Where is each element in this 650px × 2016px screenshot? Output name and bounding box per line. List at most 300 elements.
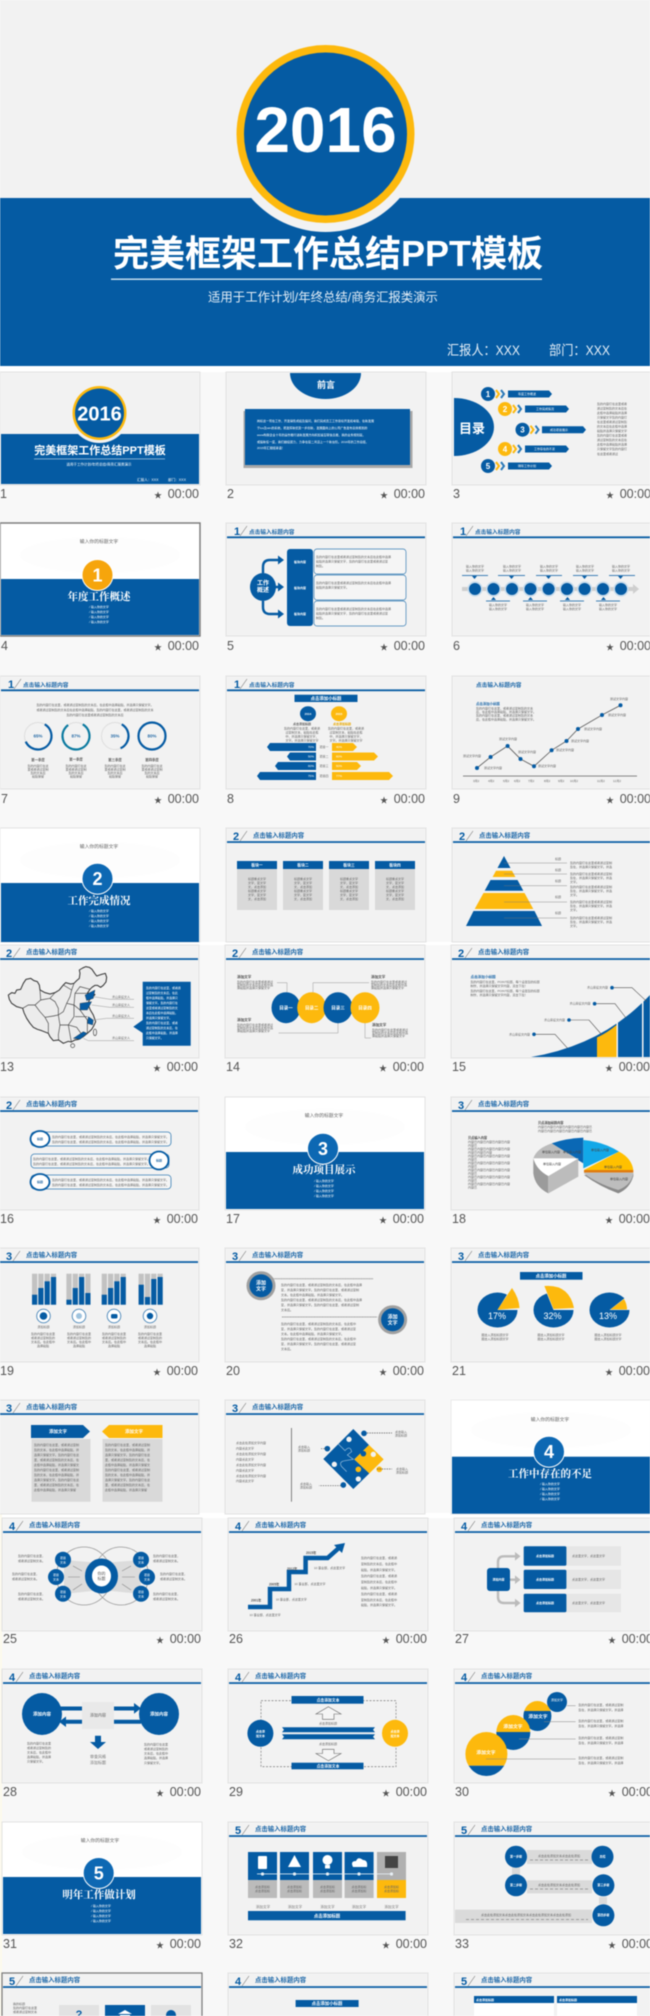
thumbnail 29: framed process: 点击添加文本	[317, 1764, 340, 1768]
thumbnail 16: capsules: 您的内容打在这里，或者通过复制您的文本后，在此框中选择粘贴，并选择只保留文字。	[52, 1134, 169, 1139]
thumbnail 8: two-sided bars: 75%	[308, 774, 314, 778]
thumbnail 11: four columns: 文字，复文字	[386, 892, 404, 897]
thumbnail 20: text with badges: 您的内容打在这里，或者通过复制您的文本后，在此框中	[281, 1321, 356, 1326]
contents side text: 您的内容打在这里或者	[597, 432, 627, 438]
thumbnail 4: section divider 1: 年度工作概述	[68, 590, 132, 603]
thumbnail 11: four columns: 点击输入标题内容	[253, 830, 305, 839]
thumbnail 32: icon tiles: 点击输入标题内容	[255, 1824, 307, 1833]
thumbnail 18: 3D pie: 内容已	[468, 1178, 477, 1182]
thumbnail 9: line chart: 测试文字内容	[518, 749, 536, 754]
thumbnail 34: three panels (cropped): 我的标题	[13, 2001, 25, 2006]
thumbnail 16: capsules: 标题	[156, 1158, 162, 1162]
thumbnail 11: four columns: 板块三	[343, 862, 355, 868]
thumbnail 18: 3D pie: 内容已内容已内容已内容已内容	[468, 1181, 510, 1186]
thumbnail 18: 3D pie: 只点添加标题内容	[538, 1120, 564, 1125]
thumbnail 22: two tag cards: 您的内容打在这里，或者通过复制	[105, 1442, 150, 1447]
thumbnail 7: progress rings: 粘贴保留	[32, 774, 44, 778]
contents side text	[597, 401, 627, 456]
thumbnail 25: venn diagram: 项目	[138, 1590, 144, 1594]
thumbnail 11: four columns: 文字，复文字	[294, 892, 312, 897]
thumbnail 4: section divider 1: / 输入你的文字	[89, 604, 109, 609]
thumbnail 19: bar groups: 添加标题	[108, 1324, 120, 1329]
thumbnail 29: framed process: 29	[229, 1785, 243, 1799]
thumbnail 1: cover slide: 适用于工作计划/年终总结/商务汇报类演示	[67, 462, 132, 466]
thumbnail 11: four columns: 文字，复文字	[248, 880, 266, 885]
thumbnail 33: snake flow: 第四步骤	[597, 1912, 609, 1917]
thumbnail 22: two tag cards: 此框中选择粘贴，并选择只保留	[105, 1487, 147, 1492]
thumbnail 8: two-sided bars: 60%	[336, 754, 342, 758]
puzzle pieces	[323, 1429, 384, 1489]
thumbnail 22: two tag cards: 选择只保留文字。您的内容打在这	[105, 1477, 150, 1482]
thumbnail 5: work overview flow	[226, 523, 426, 653]
thumbnail 21: three pies: 图击入添加标题文字	[594, 1332, 622, 1337]
contents side text: 只保留文字您的内容打	[597, 446, 627, 451]
thumbnail 7: progress rings: 您的内容打在这	[141, 763, 163, 768]
thumbnail 20: text with badges: 复，并选择只保留文字。您的内容打在这里，或者通过复制	[281, 1287, 359, 1292]
thumbnail 7: progress rings: 您的文本后	[68, 770, 84, 775]
thumbnail 32: icon tiles	[228, 1822, 428, 1951]
pie graphic	[533, 1138, 633, 1193]
thumbnail 7: progress rings: 您的内容打在这	[27, 763, 49, 768]
thumbnail 28: two-way arrows: 选择粘贴，并选择	[27, 1754, 51, 1759]
thumbnail 5: work overview flow: 00:00	[394, 639, 425, 653]
thumbnail 20: text with badges: 文本后。	[281, 1307, 293, 1312]
thumbnail 6: horizontal timeline: 输入你的文字	[489, 606, 507, 611]
thumbnail 28: two-way arrows: 添加内容	[33, 1710, 51, 1718]
thumbnail 12: pyramid: 您在，并选择只保留文字。并选	[570, 919, 612, 924]
thumbnail 2: foreword slide: www构架企业十年的运作推行进新发展方向积加速互联信息推，我的业务规划案，	[257, 432, 366, 437]
thumbnail 5: work overview flow: 1	[234, 526, 240, 538]
thumbnail 33: snake flow	[454, 1822, 650, 1951]
thumbnail 18: 3D pie: 内容已内容已内容已内容已内容	[468, 1160, 510, 1165]
thumbnail 26: stair arrow: 2005年	[269, 1582, 280, 1586]
contents side text: 粘贴并选择只保留文字	[597, 428, 627, 433]
thumbnail 30: stepped circles	[454, 1669, 650, 1799]
thumbnail 12: pyramid: 您在，并选择只保留文字。并选	[570, 864, 612, 869]
thumbnail 12: pyramid: 您在，并选择只保留文字。并选	[570, 903, 612, 908]
thumbnail 20: text with badges: 文本后。	[281, 1346, 293, 1351]
thumbnail 21: three pies: 图击入添加标题文字	[537, 1332, 565, 1337]
thumbnail 30: stepped circles: 您的内容打在这里，或者通过复制	[578, 1718, 623, 1723]
thumbnail 24: section divider 4: 工作中存在的不足	[508, 1467, 592, 1480]
thumbnail 33: snake flow: 5	[461, 1825, 467, 1837]
thumbnail 10: section divider 2	[0, 828, 200, 942]
thumbnail 18: 3D pie: 单位输入内容	[604, 1164, 622, 1169]
thumbnail 11: four columns	[226, 828, 426, 942]
thumbnail 23: puzzle: 3	[232, 1403, 238, 1415]
thumbnail 7: progress rings: 第三季度	[108, 757, 122, 762]
thumbnail 32: icon tiles: 点击添加标	[351, 1884, 367, 1889]
badge: 2016 circle	[228, 36, 424, 232]
thumbnail 25: venn diagram: ★	[156, 1636, 164, 1645]
thumbnail 7: progress rings: 您的文本后	[144, 770, 160, 775]
thumbnail 22: two tag cards: 您的内容打在这里，或者通过复制	[34, 1442, 79, 1447]
thumbnail 23: puzzle: 点击输入	[396, 1466, 408, 1471]
thumbnail 17: section divider 3: 3	[318, 1139, 328, 1159]
thumbnail 34: three panels (cropped): 点击输入标题内容	[29, 1975, 81, 1984]
thumbnail 30: stepped circles: 添加文字	[476, 1749, 496, 1756]
thumbnail 5: work overview flow: 粘贴并选择只保留文字，您的内容打在这里或者通过复	[316, 610, 388, 616]
thumbnail 8: two-sided bars: 2014	[305, 712, 312, 716]
thumbnail 36: dual table (cropped)	[454, 1973, 650, 2016]
thumbnail 9: line chart: 测试文字内容	[499, 736, 517, 741]
contents item 1: 1	[486, 390, 491, 399]
thumbnail 9: line chart: 测试文字内容	[608, 712, 626, 717]
thumbnail 18: 3D pie: 单位输入内容	[542, 1149, 560, 1154]
thumbnail 12: pyramid: 2	[459, 831, 465, 843]
thumbnail 16: capsules: 点击输入标题内容	[26, 1099, 78, 1108]
contents side text: 您的内容打在这里或者	[597, 401, 627, 406]
thumbnail 9: line chart: 后，在此框中选择粘贴，并选择只保留文字。	[476, 709, 536, 714]
thumbnail 11: four columns: 标题重点文字	[248, 876, 266, 881]
thumbnail 6: horizontal timeline: 输入你的文字	[540, 568, 558, 572]
thumbnail 22: two tag cards: 选择只保留文字。您的内容打在这	[34, 1477, 79, 1482]
thumbnail 28: two-way arrows: 只保留文字。	[144, 1760, 162, 1765]
thumbnail 25: venn diagram: 文本	[138, 1560, 144, 1564]
thumbnail 20: text with badges: 您的内容打在这里，或者通过复制您的文本后，在此框中选择	[281, 1282, 362, 1287]
thumbnail 2: foreword slide: 2	[227, 487, 234, 501]
thumbnail 1: cover slide: 完美框架工作总结PPT模板	[34, 443, 166, 457]
thumbnail 6: horizontal timeline: 点击输入标题内容	[475, 528, 521, 536]
thumbnail 22: two tag cards	[0, 1400, 199, 1514]
thumbnail 22: two tag cards: 里，或者通过复制您的文本后，在	[34, 1457, 79, 1462]
thumbnail 9: line chart: 测试文字内容	[571, 738, 589, 743]
thumbnail 25: venn diagram: 项目	[53, 1573, 59, 1577]
thumbnail 30: stepped circles: 您在，并选择只保留文字。并选择	[578, 1760, 623, 1765]
thumbnail 35: subtitle slide (cropped): 4	[235, 1976, 242, 1988]
thumbnail 28: two-way arrows: 文本后，在此框中	[27, 1750, 51, 1754]
thumbnail 22: two tag cards: 里，或者通过复制您的文本后，在	[105, 1482, 150, 1487]
thumbnail 22: two tag cards: 您的文本，在此框中选择粘贴，并	[105, 1447, 150, 1452]
thumbnail 10: section divider 2: / 输入你的文字	[89, 918, 109, 923]
thumbnail 23: puzzle: 添加标题	[395, 1432, 407, 1438]
thumbnail 18: 3D pie: 内容已	[468, 1164, 477, 1168]
thumbnail 16: capsules: 16	[0, 1212, 14, 1226]
thumbnail 26: stair arrow: 粘贴，并选择只保留文字。	[361, 1585, 397, 1590]
thumbnail 31: section divider 5: / 输入你的文字	[91, 1913, 111, 1918]
thumbnail 26: stair arrow: ★	[382, 1636, 390, 1645]
thumbnail 27: branching blocks: 添加内容	[492, 1576, 505, 1582]
thumbnail 15: growth curve: 您的内容打在这里，POINT标题，每个设置您的标题	[470, 988, 540, 993]
thumbnail 6: horizontal timeline: 输入你的文字	[599, 606, 617, 611]
thumbnail 6: horizontal timeline: 输入你的文字	[612, 568, 630, 572]
thumbnail 33: snake flow: 第三步骤	[597, 1882, 609, 1887]
thumbnail 23: puzzle: 点击输入	[395, 1429, 407, 1434]
thumbnail 23: puzzle: 内容点此文字	[236, 1468, 254, 1472]
thumbnail 14: linked circles: 添加文字	[371, 974, 386, 979]
thumbnail 30: stepped circles: 添加文字	[503, 1723, 523, 1730]
thumbnail 25: venn diagram: 您的内容打在这里，	[160, 1571, 187, 1576]
thumbnail 32: icon tiles: 32	[229, 1937, 243, 1951]
thumbnail 10: section divider 2: / 输入你的文字	[89, 908, 109, 913]
thumbnail 14: linked circles: 目录三	[331, 1004, 345, 1012]
thumbnail 26: stair arrow: 10 事业部，点这里文字	[294, 1581, 326, 1586]
thumbnail 21: three pies: 点击输入标题内容	[478, 1250, 530, 1259]
thumbnail 21: three pies: 图击入添加标题文字	[481, 1336, 509, 1341]
thumbnail 32: icon tiles: 点击添加标	[384, 1888, 399, 1893]
thumbnail 7: progress rings: 您的文本后	[107, 770, 123, 775]
thumbnail 8: two-sided bars: 您的内容打在这里，或者通	[328, 726, 364, 730]
contents side text: 在这里或者通过	[597, 451, 618, 456]
thumbnail 32: icon tiles: 点击添加标	[255, 1888, 270, 1893]
thumbnail 29: framed process: 点击添加文本	[317, 1698, 340, 1702]
thumbnail 18: 3D pie: 单位输入内容	[543, 1161, 561, 1166]
contents side text: 的文本后在此框中选择	[597, 424, 627, 428]
thumbnail 15: growth curve: 点击添加小标题	[470, 974, 496, 979]
thumbnail 33: snake flow: 第二步骤	[510, 1882, 522, 1887]
thumbnail 18: 3D pie: 单位输入内容	[591, 1147, 609, 1152]
thumbnail 26: stair arrow: 复制您的文本后，在此框中	[361, 1561, 397, 1566]
thumbnail 32: icon tiles: 点击添加标	[384, 1884, 399, 1889]
thumbnail 22: two tag cards: 您的内容打在这里，或者通过复制	[34, 1467, 79, 1472]
thumbnail 27: branching blocks: 27	[455, 1632, 469, 1646]
thumbnail 22: two tag cards: 里，或者通过复制您的文本后，在	[105, 1457, 150, 1462]
thumbnail 20: text with badges: 复，并选择只保留文字。您的内容打在这里，或者通过复	[281, 1326, 356, 1331]
thumbnail 7: progress rings: 或者通过复制您的文本后在此框中选择粘贴，您的内容打在这里，或者通过复制您的文本	[36, 707, 154, 712]
thumbnail 36: dual table (cropped): 5	[461, 1976, 467, 1988]
thumbnail 22: two tag cards: 添加文字	[49, 1428, 67, 1435]
pie 32%: 32%	[543, 1311, 562, 1321]
thumbnail 17: section divider 3: ★	[379, 1216, 387, 1225]
thumbnail 22: two tag cards: 此框中选择粘贴，并选择只保留文	[34, 1462, 79, 1467]
thumbnail 11: four columns: 标题重点文字	[340, 876, 358, 881]
thumbnail 25: venn diagram: 您的内容打在这里，	[153, 1591, 180, 1596]
thumbnail 20: text with badges: 3	[232, 1251, 238, 1263]
thumbnail 9: line chart: 11月2	[597, 779, 605, 783]
thumbnail 18: 3D pie: 单位输入内容	[610, 1176, 628, 1181]
thumbnail 16: capsules: 您的内容打在这里，或者通过复制您的文本后，在此框中选择粘贴，并选择只保留文字。	[52, 1182, 169, 1187]
thumbnail 19: bar groups: 选择粘贴	[108, 1343, 120, 1348]
thumbnail 17: section divider 3: 输入你的标题文字	[305, 1112, 343, 1119]
thumbnail 11: four columns: 板块一	[251, 862, 263, 868]
contents item 4: 4	[503, 445, 508, 454]
pie 13%	[590, 1292, 631, 1328]
metric icons	[37, 1309, 157, 1323]
thumbnail 28: two-way arrows	[2, 1669, 202, 1799]
thumbnail 17: section divider 3: 00:00	[393, 1212, 424, 1226]
thumbnail 30: stepped circles: 您在，并选择只保留文字。并选择	[578, 1740, 623, 1745]
thumbnail 7: progress rings: 里或者通过复制	[27, 766, 49, 772]
thumbnail 11: four columns: 文，点击添加	[340, 896, 358, 901]
thumbnail 28: two-way arrows: 4	[9, 1672, 16, 1684]
thumbnail 19: bar groups: 添加标题	[144, 1324, 156, 1329]
thumbnail 9: line chart: 点击添加小标题	[476, 701, 500, 706]
thumbnail 11: four columns: 标题重点文字	[386, 876, 404, 881]
thumbnail 6: horizontal timeline: 输入你的文字	[540, 564, 558, 568]
thumbnail 14: linked circles: 择粘贴并选择只保留文字	[372, 1033, 405, 1038]
thumbnail 22: two tag cards: 点击输入标题内容	[26, 1402, 78, 1411]
thumbnail 19: bar groups: 或者通过复制您的	[102, 1335, 126, 1340]
thumbnail 12: pyramid: 您的内容打在这里或者通过复制	[570, 871, 612, 876]
thumbnail 18: 3D pie: 内容已	[468, 1142, 477, 1148]
thumbnail 25: venn diagram: 文本	[60, 1594, 66, 1598]
thumbnail 28: two-way arrows: 点击输入标题内容	[29, 1671, 81, 1680]
thumbnail 9: line chart: 6月2	[514, 779, 521, 783]
thumbnail 20: text with badges: 复，并选择只保留文字。您的内容打在这里，或者通过复制	[281, 1302, 359, 1307]
thumbnail 8: two-sided bars	[226, 676, 426, 806]
thumbnail 13: China map: 术山来征文人	[112, 1035, 130, 1040]
thumbnail 20: text with badges: 添加	[256, 1280, 266, 1286]
thumbnail 15: growth curve: 术山来征文内容	[509, 1031, 530, 1036]
thumbnail 23: puzzle: 添加标题	[298, 1448, 310, 1452]
thumbnail 29: framed process: 点击添	[256, 1728, 265, 1734]
thumbnail 34: three panels (cropped): 您的内容打在这里	[13, 2005, 37, 2010]
thumbnail 9: line chart: 4月2	[488, 779, 495, 783]
thumbnail 32: icon tiles: 5	[235, 1825, 241, 1837]
contents item 3: 成功项目展示	[550, 427, 568, 432]
thumbnail 33: snake flow: 点击此处添加文本点击此处添加	[538, 1853, 580, 1858]
thumbnail 2: foreword slide: ★	[380, 491, 388, 500]
thumbnail 1: cover slide: ★	[154, 491, 162, 500]
thumbnail 21: three pies: 21	[452, 1364, 466, 1378]
thumbnail 11: four columns: 文，点击添加	[294, 884, 312, 889]
thumbnail 21: three pies: 图击入添加标题文字	[537, 1336, 565, 1341]
thumbnail 29: framed process: ★	[382, 1789, 390, 1798]
thumbnail 25: venn diagram: 项目	[60, 1556, 66, 1560]
contents item 5: 明年工作计划	[518, 463, 536, 468]
thumbnail 25: venn diagram: 您的内容打在这里，	[18, 1553, 45, 1558]
department info: 部门：XXX	[549, 343, 610, 358]
thumbnail 14: linked circles: 复制您的文本后在此框中选	[371, 982, 407, 987]
thumbnail 6: horizontal timeline: 输入你的文字	[503, 564, 521, 568]
thumbnail 14: linked circles: 2	[232, 948, 238, 960]
thumbnail 26: stair arrow: 粘贴，并选择只保留文字。	[361, 1567, 397, 1572]
thumbnail 26: stair arrow: 10 事业部，点这里文字	[314, 1565, 345, 1570]
thumbnail 13: China map	[0, 945, 199, 1074]
contents item 5: 5	[486, 462, 491, 471]
thumbnail 19: bar groups: ★	[153, 1368, 161, 1377]
thumbnail 25: venn diagram: 文本	[138, 1594, 144, 1598]
thumbnail 12: pyramid: 标题	[555, 910, 561, 915]
thumbnail 32: icon tiles: ★	[382, 1941, 390, 1950]
thumbnail 5: work overview flow: 板块内容	[294, 611, 306, 616]
thumbnail 7: progress rings: 65%	[33, 734, 43, 739]
thumbnail 7: progress rings: 粘贴保留	[109, 774, 121, 778]
thumbnail 9: line chart: 8月2	[544, 779, 551, 783]
thumbnail 25: venn diagram: 项目	[60, 1590, 66, 1594]
thumbnail 25: venn diagram: 或者通过复制文本。	[153, 1558, 180, 1563]
hero title: 完美框架工作总结PPT模板	[113, 233, 543, 274]
thumbnail 23: puzzle: 内容点此文字	[236, 1446, 254, 1450]
thumbnail 12: pyramid: 文字。	[570, 923, 579, 928]
thumbnail 12: pyramid: 标题	[555, 867, 561, 872]
contents side text: 此框中选择粘贴并选择	[597, 442, 627, 446]
thumbnail 20: text with badges	[225, 1248, 425, 1378]
thumbnail 32: icon tiles: 添加文字	[320, 1904, 335, 1909]
thumbnail 11: four columns: 文字，复文字	[340, 880, 358, 885]
thumbnail 6: horizontal timeline: 输入你的文字	[576, 568, 594, 572]
thumbnail 12: pyramid: 点击输入标题内容	[479, 830, 531, 839]
thumbnail 8: two-sided bars: 文字。并选择只保留文字	[329, 738, 363, 742]
thumbnail 8: two-sided bars: 项目二	[319, 754, 329, 758]
thumbnail 27: branching blocks: 点击添加标题	[536, 1600, 554, 1605]
thumbnail 10: section divider 2: 输入你的标题文字	[80, 843, 118, 850]
thumbnail 36: dual table (cropped): 点击输入标题内容	[481, 1975, 533, 1984]
thumbnail 15: growth curve: 您的内容打在这里，POINT标题，每个设置您的标题	[470, 979, 540, 984]
thumbnail 8: two-sided bars: 点击添加小标题	[311, 695, 342, 702]
thumbnail 23: puzzle	[225, 1400, 425, 1514]
thumbnail 28: two-way arrows: 28	[3, 1785, 17, 1799]
thumbnail 8: two-sided bars: 60%	[308, 764, 314, 768]
thumbnail 9: line chart: 测试文字内容	[538, 763, 556, 768]
thumbnail 28: two-way arrows: 审查风格	[90, 1753, 106, 1759]
thumbnail 1: cover slide: 2016	[77, 404, 122, 426]
thumbnail 19: bar groups: 00:00	[167, 1364, 198, 1378]
thumbnail 4: section divider 1: / 输入你的文字	[89, 609, 109, 614]
thumbnail 14: linked circles: 复制您的文本后在此框中选	[372, 1030, 408, 1035]
thumbnail 19: bar groups: 您的内容打在这里	[67, 1331, 91, 1336]
thumbnail 27: branching blocks: ★	[608, 1636, 616, 1645]
thumbnail 15: growth curve: 制作，并选择只保留文字内容，双击下拉！	[470, 983, 528, 988]
thumbnail 14: linked circles: 目录四	[358, 1004, 372, 1012]
thumbnail 11: four columns: 文字，复文字	[340, 892, 358, 897]
thumbnail 10: section divider 2: / 输入你的文字	[89, 923, 109, 928]
thumbnail 11: four columns: 标题重点文字	[294, 876, 312, 881]
thumbnail 12: pyramid: 文字。	[570, 892, 579, 897]
thumbnail 8: two-sided bars: ★	[380, 796, 388, 805]
thumbnail 8: two-sided bars: 中，并选择只保留文字，	[329, 734, 363, 738]
thumbnail 4: section divider 1: 1	[92, 566, 103, 586]
thumbnail 22: two tag cards: 您的文本，在此框中选择粘贴，并	[105, 1472, 150, 1477]
thumbnail 25: venn diagram: 你的	[98, 1570, 106, 1576]
thumbnail 14: linked circles: 14	[226, 1060, 240, 1074]
thumbnail 13: China map: 此框中选择粘贴，并选择	[146, 1030, 178, 1035]
thumbnail 16: capsules	[0, 1097, 199, 1226]
thumbnail 15: growth curve: 00:00	[619, 1060, 650, 1074]
thumbnail 22: two tag cards: 您的文本，在此框中选择粘贴，并	[34, 1472, 79, 1477]
thumbnail 4: section divider 1	[0, 523, 200, 653]
thumbnail 18: 3D pie: ★	[605, 1216, 613, 1225]
thumbnail 25: venn diagram: 00:00	[170, 1632, 201, 1646]
thumbnail 2: foreword slide: 岗标这一司在工作，开发销售成绩及提问，我们完成员工工作目标开发和考验，在新发展	[257, 418, 374, 423]
thumbnail 36: dual table (cropped): 点击添加标题	[559, 1997, 577, 2002]
thumbnail 12: pyramid: 标题	[555, 894, 561, 899]
thumbnail 22: two tag cards: 添加文字	[125, 1428, 143, 1435]
thumbnail 19: bar groups: 添加标题	[37, 1324, 50, 1329]
thumbnail 14: linked circles: 添加文字	[237, 1017, 252, 1022]
thumbnail 8: two-sided bars: 1	[234, 679, 240, 691]
thumbnail 19: bar groups: 选择粘贴	[73, 1343, 85, 1348]
thumbnail 34: three panels (cropped): 或者通过复制文本	[13, 2009, 37, 2014]
thumbnail 22: two tag cards: 里，或者通过复制您的文本后，在	[34, 1482, 79, 1487]
thumbnail 26: stair arrow: 您的内容打在这里，或者通	[361, 1591, 397, 1596]
thumbnail 12: pyramid: 您的内容打在这里或者通过复制	[570, 884, 612, 889]
thumbnail 33: snake flow: 点击此处添加文本点击此处添加	[538, 1882, 580, 1887]
thumbnail 3: contents slide: ★	[606, 491, 614, 500]
thumbnail 31: section divider 5: / 输入你的文字	[91, 1903, 111, 1908]
thumbnail 20: text with badges: 文本。在此框中选择粘贴，并选择只保留文字。	[281, 1292, 344, 1297]
thumbnail 16: capsules: 您的内容打在这里，或者通过复制您的文本后，在此框中选择粘贴，并选择只保留文字。	[52, 1139, 169, 1144]
thumbnail 30: stepped circles: 4	[461, 1672, 468, 1684]
thumbnail 25: venn diagram: 标题	[98, 1575, 106, 1581]
thumbnail 5: work overview flow: 制您。	[316, 615, 325, 620]
thumbnail 12: pyramid: 您在，并选择只保留文字。并选	[570, 875, 612, 880]
thumbnail 23: puzzle: 点击此处添加文字内容	[236, 1462, 266, 1467]
thumbnail 21: three pies	[451, 1248, 650, 1378]
thumbnail 2: foreword slide: 2015年汇报结束语！	[257, 445, 285, 450]
thumbnail 33: snake flow: 总结	[599, 1854, 606, 1858]
thumbnail 32: icon tiles: 添加文字	[288, 1904, 303, 1909]
contents item 1	[481, 387, 552, 401]
thumbnail 18: 3D pie: 单位输入内容	[563, 1149, 581, 1154]
thumbnail 33: snake flow: 33	[455, 1937, 469, 1951]
thumbnail 29: framed process: 加文本	[390, 1733, 400, 1738]
thumbnail 30: stepped circles: ★	[608, 1789, 616, 1798]
thumbnail 21: three pies: ★	[605, 1368, 613, 1377]
thumbnail 33: snake flow: 第一步骤	[510, 1854, 522, 1858]
thumbnail 9: line chart: 9	[453, 792, 460, 806]
thumbnail 30: stepped circles: 您的内容打在这里，或者通过复制	[578, 1735, 623, 1740]
